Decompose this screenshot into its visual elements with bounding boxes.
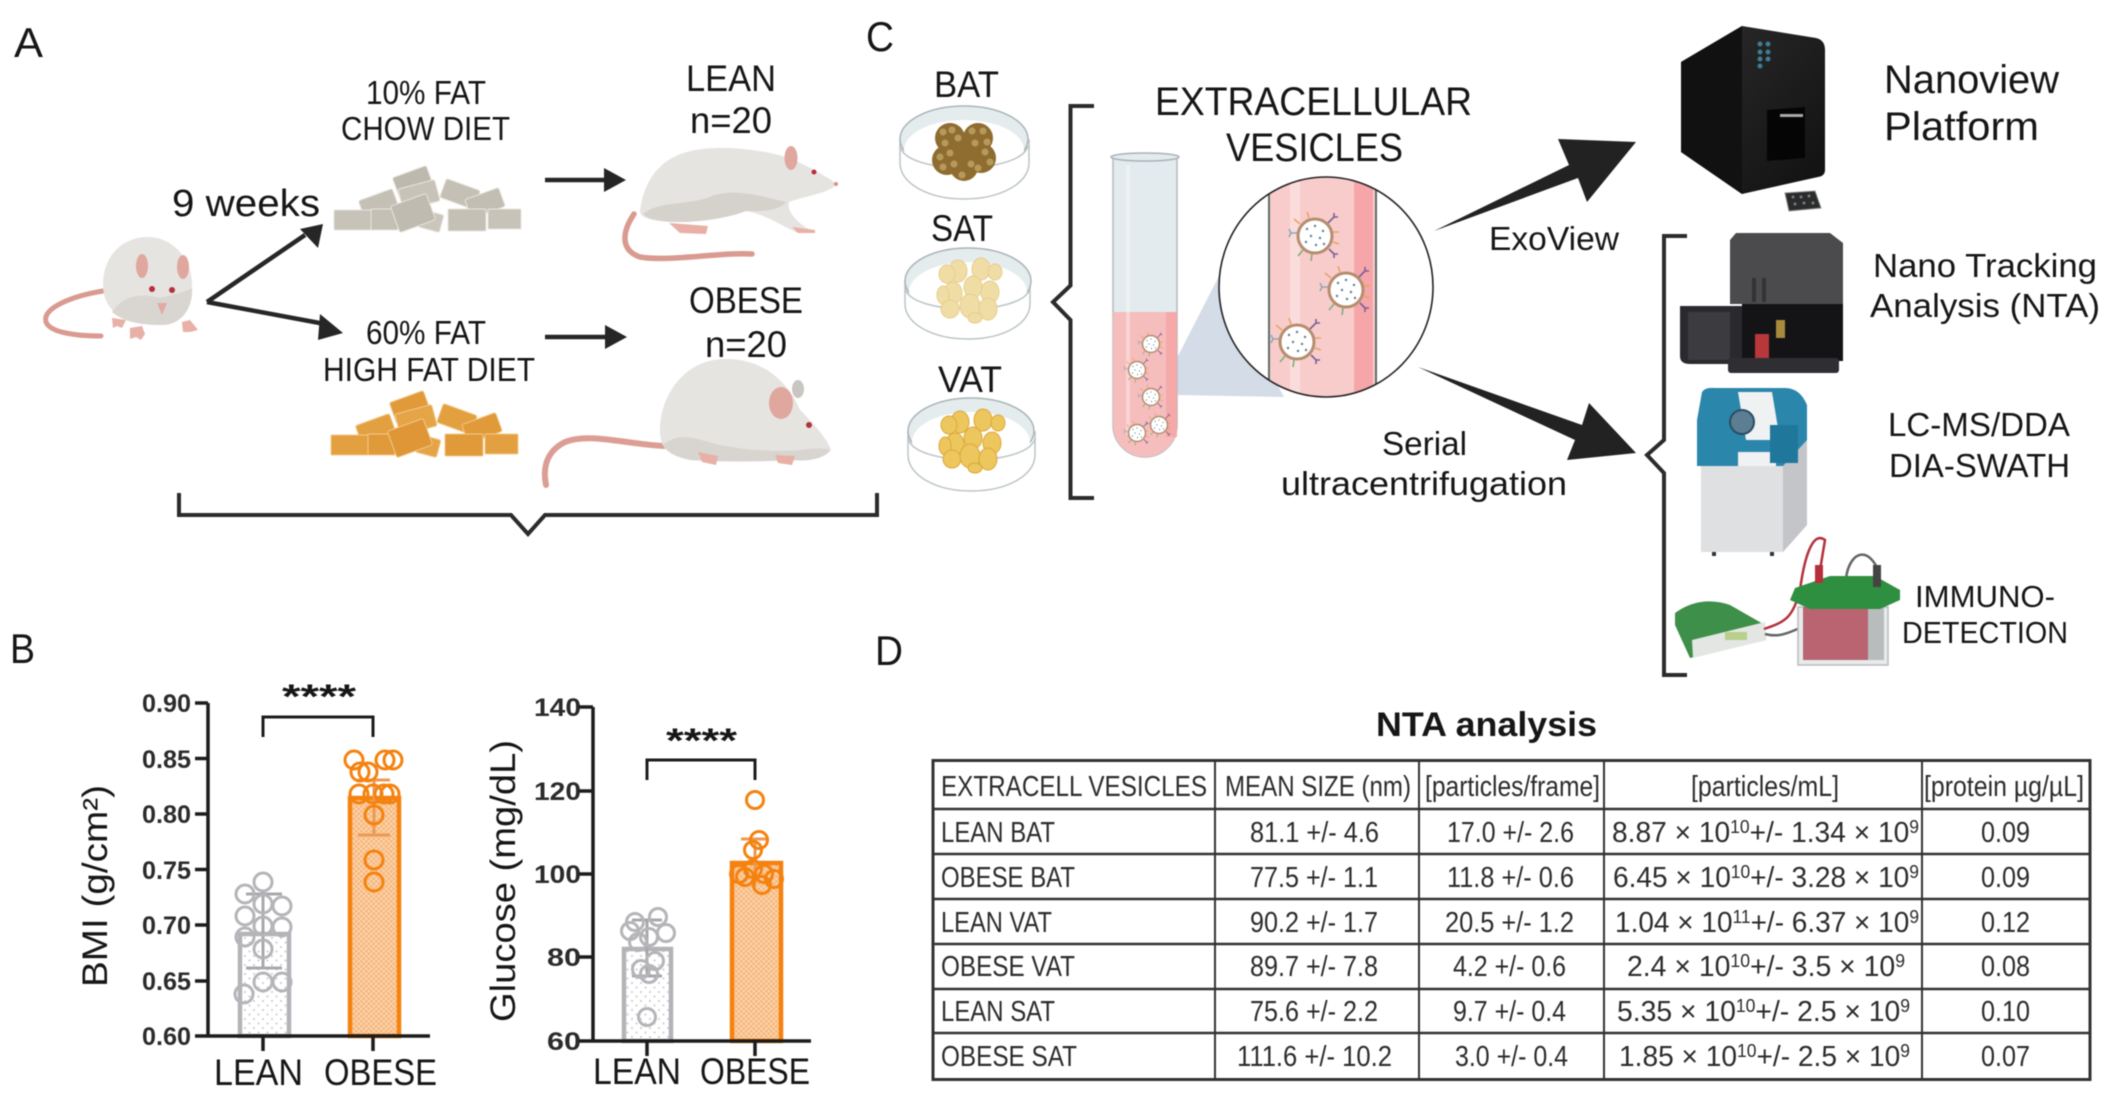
label: obese n=20: OBESE (689, 280, 803, 321)
error bars BMI (246, 780, 390, 968)
table row: lean BAT (941, 817, 2030, 849)
table row: obese BAT: OBESE BAT (941, 862, 1075, 894)
bar: obese BMI (350, 798, 399, 1036)
y axis tick labels: BMI: 0.85 (142, 746, 191, 774)
bar: obese glucose (732, 863, 781, 1041)
label: ExoView: ExoView (1489, 220, 1619, 257)
label: serial ultracentrifugation (1281, 425, 1567, 502)
table row: lean VAT: 90.2 +/- 1.7 (1250, 907, 1378, 939)
label: BAT: BAT (934, 64, 999, 105)
label: 60% fat high fat diet: 60% FAT (366, 314, 486, 351)
y axis tick labels: glucose: 140 (534, 694, 581, 722)
table row: obese BAT: 77.5 +/- 1.1 (1250, 862, 1378, 894)
table row: obese VAT: 9 (1895, 951, 1905, 971)
table row: lean SAT: 9 (1900, 996, 1910, 1016)
panel C: vesicle isolation workflow (866, 13, 2100, 675)
table header row: [protein µg/µL] (1924, 771, 2084, 803)
table row: lean BAT: +/- 1.34 × 10 (1750, 817, 1909, 849)
table row: obese VAT: 4.2 +/- 0.6 (1453, 951, 1566, 983)
label: Nanoview Platform: Platform (1884, 105, 2039, 149)
heading: extracellular vesicles: EXTRACELLULAR (1155, 80, 1472, 124)
arrow: to Nanoview (1434, 139, 1636, 231)
label: 60% fat high fat diet: HIGH FAT DIET (323, 351, 535, 388)
y axis tick labels: glucose: 100 (534, 861, 581, 889)
bracket: tissues to tube (1053, 106, 1094, 498)
error bars glucose (632, 839, 769, 976)
y axis tick labels: BMI: 0.60 (142, 1023, 191, 1051)
icon: SAT petri dish (905, 248, 1031, 339)
table row: lean VAT: LEAN VAT (941, 907, 1052, 939)
label: obese n=20: n=20 (705, 324, 787, 365)
table row: lean BAT: 81.1 +/- 4.6 (1250, 817, 1379, 849)
label: Nano Tracking Analysis (NTA): Analysis (NTA) (1870, 287, 2100, 324)
arrow: chow to lean (545, 168, 626, 192)
table row: obese BAT: 0.09 (1981, 862, 2030, 894)
icon: zoom wedge (1176, 276, 1284, 397)
x labels BMI: LEAN (214, 1052, 303, 1093)
icon: NTA instrument (1680, 233, 1843, 373)
axes glucose (579, 707, 811, 1056)
panel B: BMI and glucose bar charts (10, 625, 811, 1093)
table row: obese VAT: 0.08 (1981, 951, 2030, 983)
table row: obese SAT: 3.0 +/- 0.4 (1455, 1041, 1568, 1073)
label: 10% fat chow diet: 10% FAT (366, 74, 486, 111)
table row: obese VAT: 10 (1730, 951, 1750, 971)
heading: extracellular vesicles (1155, 80, 1472, 170)
label: 9 weeks: 9 weeks (172, 183, 320, 225)
bar chart: BMI (76, 678, 437, 1093)
panel A: diet study design (14, 19, 877, 534)
table row: lean VAT: +/- 6.37 × 10 (1751, 907, 1909, 939)
table row: obese BAT: 10 (1731, 862, 1750, 882)
table row: obese SAT: 111.6 +/- 10.2 (1237, 1041, 1392, 1073)
axis title: glucose: Glucose (mg/dL) (484, 740, 523, 1022)
y axis tick labels: BMI (142, 690, 191, 1051)
table row: obese VAT: OBESE VAT (941, 951, 1075, 983)
panel letter D: D (875, 627, 903, 674)
table row: obese BAT (941, 862, 2030, 894)
panel D: NTA analysis table (875, 627, 2090, 1080)
table row: obese BAT: 6.45 × 10 (1613, 862, 1735, 894)
icon: chow pellets (334, 166, 521, 233)
data points: obese BMI (345, 751, 402, 891)
bracket: analysis methods (1647, 236, 1687, 675)
label: obese n=20 (689, 280, 803, 365)
table row: lean SAT: 0.10 (1981, 996, 2030, 1028)
significance stars glucose: **** (666, 722, 738, 760)
label: SAT: SAT (931, 208, 993, 249)
table row: obese SAT: 0.07 (1981, 1041, 2030, 1073)
table row: lean SAT: 10 (1736, 996, 1755, 1016)
label: VAT: VAT (938, 359, 1002, 400)
label: 10% fat chow diet (341, 74, 510, 147)
table row: lean SAT: 75.6 +/- 2.2 (1250, 996, 1378, 1028)
table row: obese SAT: 1.85 × 10 (1619, 1041, 1741, 1073)
icon: VAT petri dish (908, 398, 1035, 491)
label: serial ultracentrifugation: ultracentrifugation (1281, 465, 1567, 502)
y axis tick labels: BMI: 0.90 (142, 690, 191, 718)
y axis tick labels: glucose: 120 (534, 778, 581, 806)
table row: lean VAT: 11 (1733, 907, 1751, 927)
label: lean n=20: n=20 (690, 100, 772, 141)
x labels BMI: OBESE (324, 1052, 437, 1093)
table row: obese VAT: 89.7 +/- 7.8 (1250, 951, 1378, 983)
table row: lean VAT: 1.04 × 10 (1615, 907, 1737, 939)
arrow: to high fat diet (207, 302, 343, 340)
table row: obese VAT (941, 951, 2030, 983)
table row: lean SAT: +/- 2.5 × 10 (1755, 996, 1900, 1028)
panel letter A: A (14, 19, 43, 66)
label: lean n=20 (686, 58, 776, 141)
table row: obese BAT: 9 (1909, 862, 1919, 882)
icon: lean rat (625, 146, 838, 258)
table row: obese VAT: 2.4 × 10 (1627, 951, 1733, 983)
table row: obese BAT: 11.8 +/- 0.6 (1447, 862, 1574, 894)
bar chart: glucose (484, 694, 811, 1092)
y axis tick labels: glucose: 60 (547, 1028, 581, 1056)
significance stars BMI: **** (282, 678, 357, 716)
significance bracket BMI (263, 717, 373, 737)
label: LC-MS DIA-SWATH: LC-MS/DDA (1888, 406, 2070, 443)
table row: obese SAT: OBESE SAT (941, 1041, 1077, 1073)
label: Nanoview Platform: Nanoview (1884, 58, 2059, 102)
table title: NTA analysis (1376, 706, 1597, 744)
arrow: high fat to obese (545, 325, 627, 349)
table row: lean BAT: 10 (1730, 817, 1750, 837)
label: Nano Tracking Analysis (NTA) (1870, 247, 2100, 324)
data points: lean glucose (622, 908, 674, 1026)
icon: Nanoview instrument (1681, 26, 1825, 211)
label: lean n=20: LEAN (686, 58, 776, 99)
icon: starting rat (46, 237, 198, 340)
label: serial ultracentrifugation: Serial (1382, 425, 1467, 462)
label: 10% fat chow diet: CHOW DIET (341, 110, 510, 147)
table row: obese BAT: +/- 3.28 × 10 (1750, 862, 1909, 894)
table row: obese SAT (941, 1041, 2030, 1073)
table row: lean VAT (941, 907, 2030, 939)
table row: lean BAT: 0.09 (1981, 817, 2030, 849)
y axis tick labels: glucose: 80 (547, 944, 581, 972)
table row: obese SAT: +/- 2.5 × 10 (1756, 1041, 1900, 1073)
heading: extracellular vesicles: VESICLES (1226, 126, 1403, 170)
label: LC-MS DIA-SWATH (1888, 406, 2070, 484)
table header row (941, 771, 2084, 803)
table row: lean SAT: LEAN SAT (941, 996, 1055, 1028)
label: immunodetection: DETECTION (1902, 615, 2068, 650)
y axis tick labels: BMI: 0.70 (142, 912, 191, 940)
x labels BMI (214, 1052, 437, 1093)
label: LC-MS DIA-SWATH: DIA-SWATH (1889, 447, 2070, 484)
bar: lean BMI (240, 934, 289, 1036)
significance bracket glucose (647, 760, 755, 780)
table row: lean SAT (941, 996, 2030, 1028)
table row: lean VAT: 20.5 +/- 1.2 (1445, 907, 1574, 939)
bar: lean glucose (624, 949, 671, 1041)
table row: lean SAT: 5.35 × 10 (1617, 996, 1739, 1028)
icon: immunodetection tank and power supply (1675, 538, 1900, 665)
icon: magnified view of tube (1219, 170, 1433, 405)
panel letter C: C (866, 13, 894, 60)
label: Nano Tracking Analysis (NTA): Nano Tracking (1873, 247, 2097, 284)
table row: lean BAT: 17.0 +/- 2.6 (1447, 817, 1574, 849)
table row: lean SAT: 9.7 +/- 0.4 (1453, 996, 1566, 1028)
table header row: [particles/mL] (1691, 771, 1839, 803)
table row: obese VAT: +/- 3.5 × 10 (1750, 951, 1895, 983)
y axis tick labels: glucose (534, 694, 581, 1056)
table row: lean BAT: 8.87 × 10 (1612, 817, 1734, 849)
label: Nanoview Platform (1884, 58, 2059, 149)
table header row: MEAN SIZE (nm) (1225, 771, 1411, 803)
icon: BAT petri dish (900, 106, 1029, 199)
x labels glucose (593, 1051, 810, 1092)
table row: lean BAT: 9 (1909, 817, 1919, 837)
data points: obese glucose (730, 792, 782, 894)
y axis tick labels: BMI: 0.75 (142, 857, 191, 885)
table row: lean VAT: 0.12 (1981, 907, 2030, 939)
y axis tick labels: BMI: 0.65 (142, 968, 191, 996)
axis title: BMI: BMI (g/cm²) (76, 785, 115, 987)
bracket under panel A (179, 493, 877, 534)
data points: lean BMI (235, 873, 291, 1003)
x labels glucose: OBESE (700, 1051, 810, 1092)
icon: mass spectrometer (1697, 388, 1807, 556)
label: immunodetection: IMMUNO- (1915, 579, 2055, 614)
table header row: [particles/frame] (1425, 771, 1600, 803)
arrow: to analysis methods (1418, 367, 1636, 460)
icon: high fat pellets (331, 391, 518, 458)
table row: obese SAT: 10 (1737, 1041, 1756, 1061)
y axis tick labels: BMI: 0.80 (142, 801, 191, 829)
icon: test tube with vesicles (1111, 153, 1179, 457)
table row: lean VAT: 9 (1909, 907, 1919, 927)
label: immunodetection (1902, 579, 2068, 650)
x labels glucose: LEAN (593, 1051, 681, 1092)
table row: lean BAT: LEAN BAT (941, 817, 1055, 849)
panel letter B: B (10, 625, 35, 672)
arrow: to chow diet (207, 224, 323, 302)
table grid (933, 760, 2090, 1080)
table row: obese SAT: 9 (1900, 1041, 1910, 1061)
icon: obese rat (545, 359, 831, 485)
table header row: EXTRACELL VESICLES (941, 771, 1207, 803)
axes BMI (195, 703, 430, 1051)
label: 60% fat high fat diet (323, 314, 535, 388)
